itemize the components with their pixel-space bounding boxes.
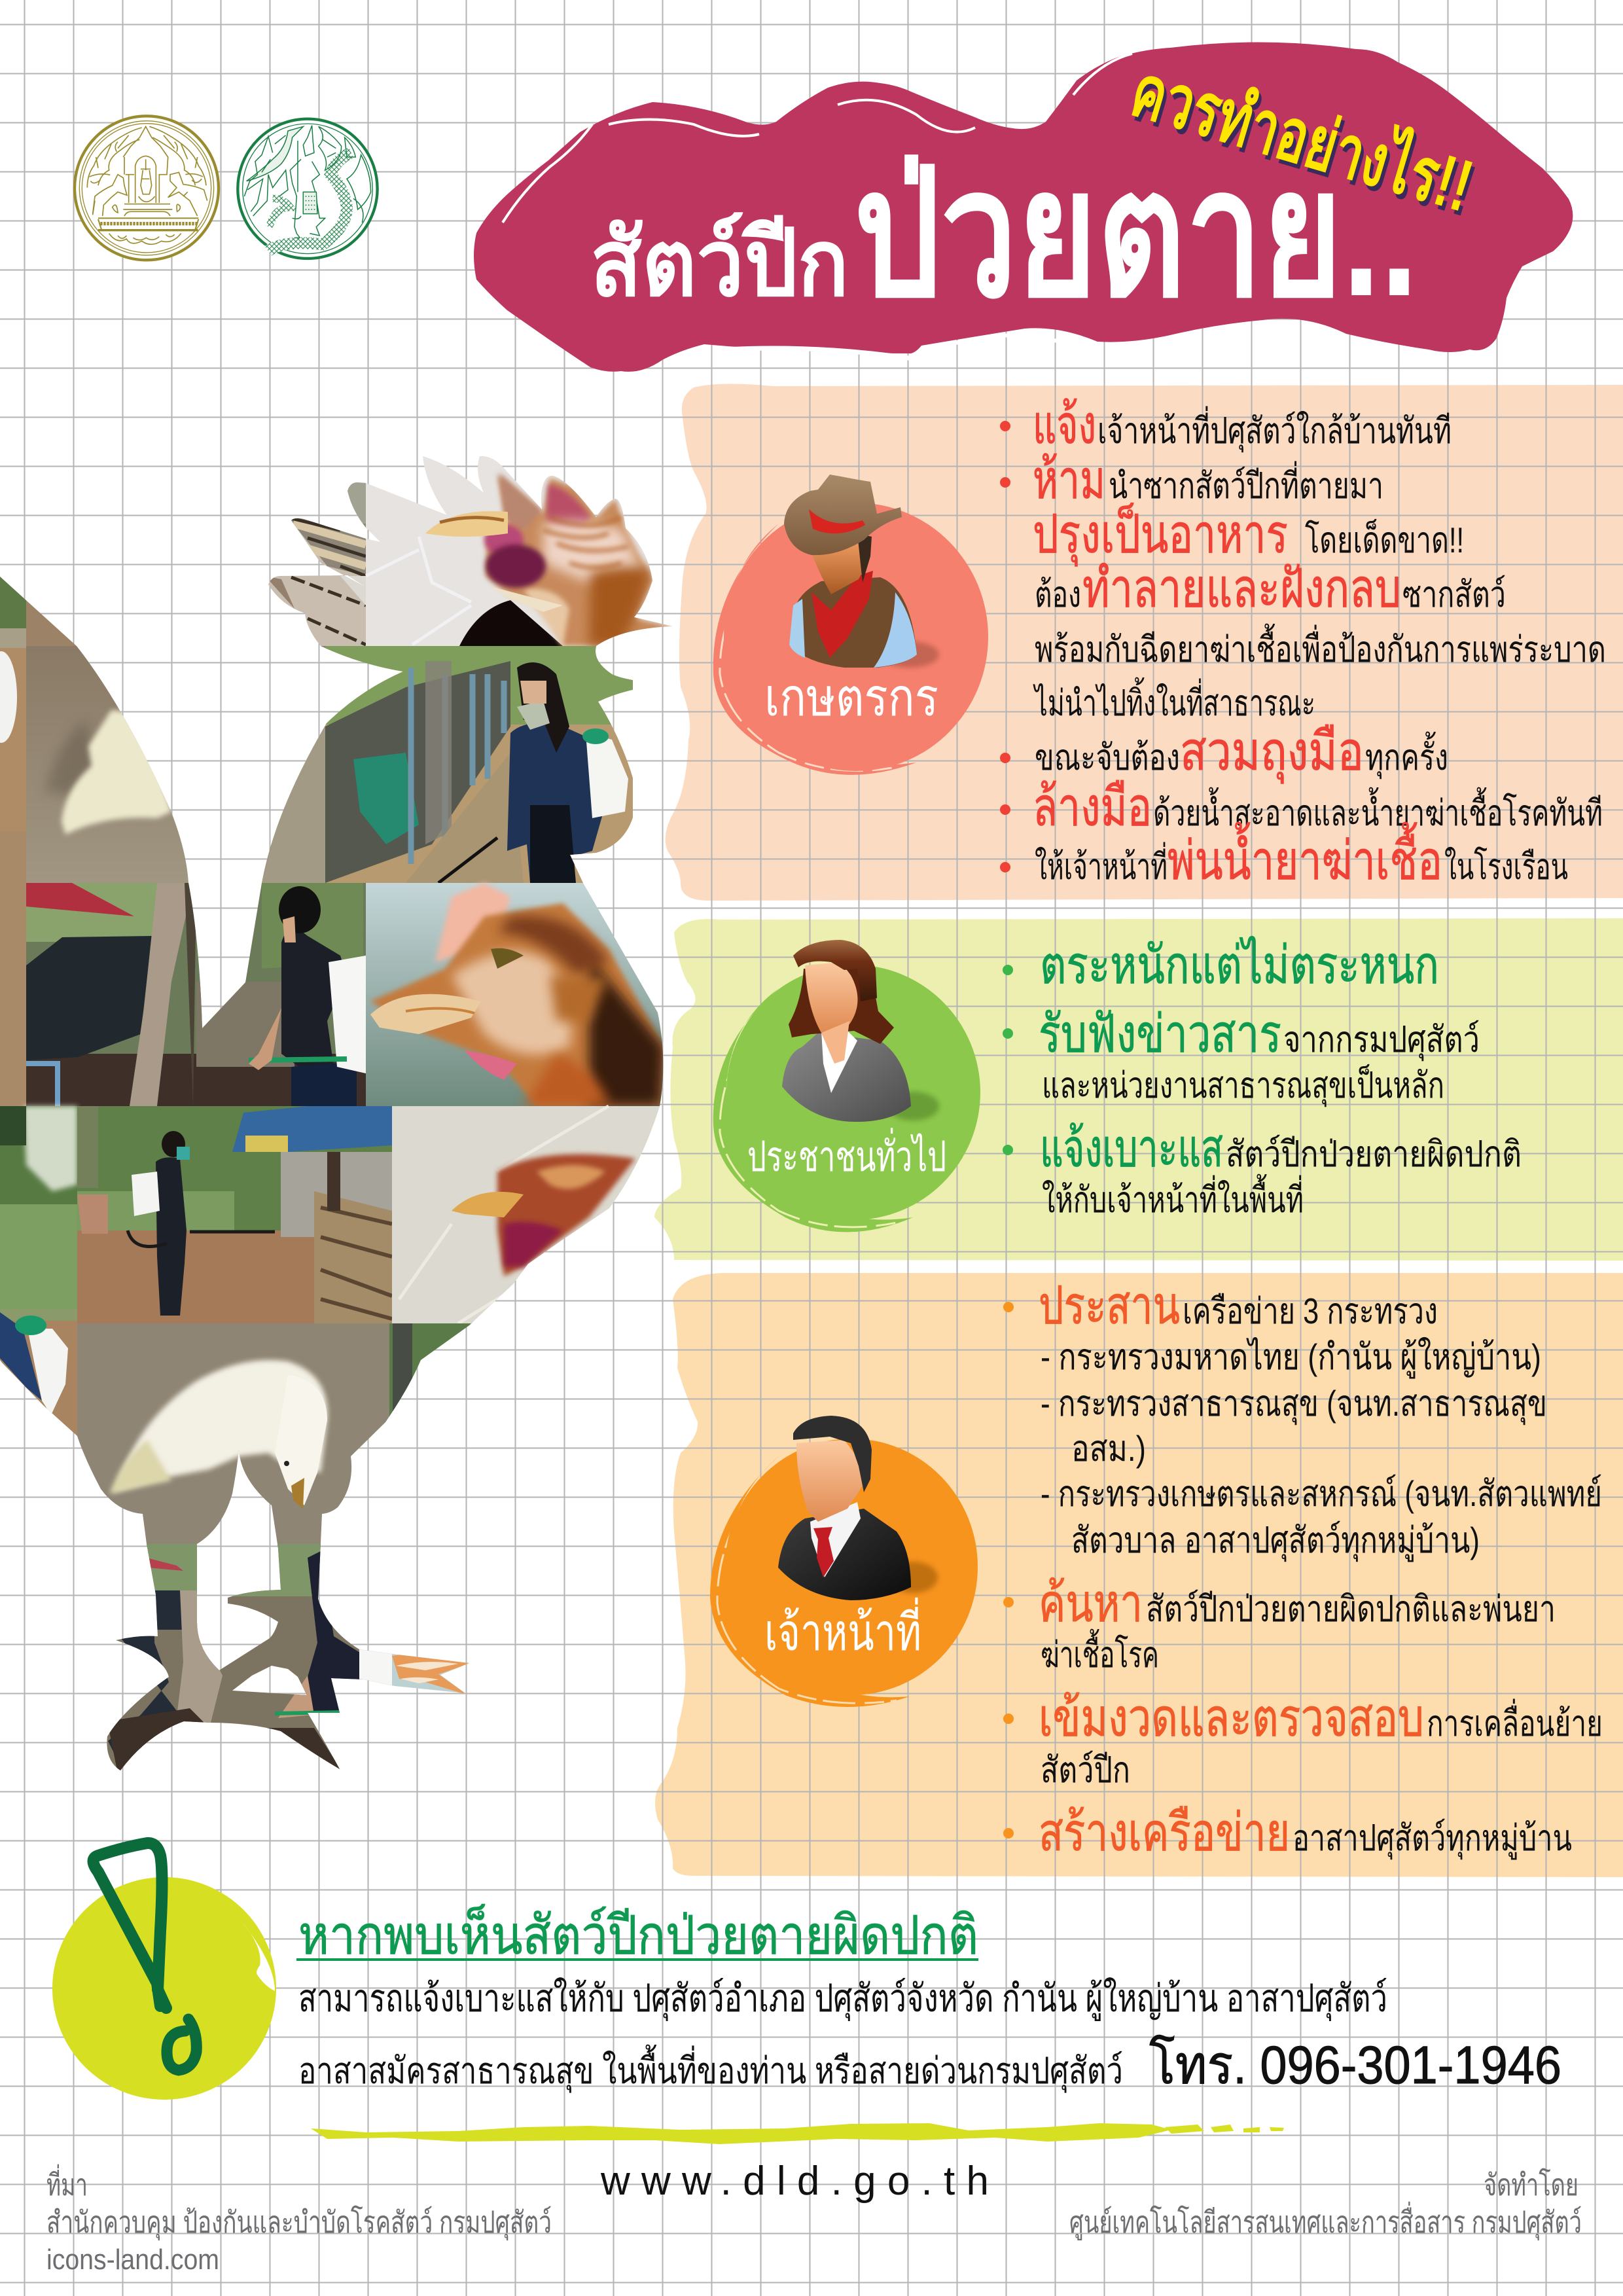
text block: public actions: รับฟังข่าวสาร: [1039, 1005, 1281, 1063]
photo tile: man spraying by crate: [77, 1106, 392, 1323]
photo tile: sick chicken purple face: [366, 452, 680, 646]
emblem: royal seal gold: [75, 116, 219, 260]
callout text: [298, 1977, 1387, 2093]
source credit: สำนักควบคุม ป้องกันและบำบัดโรคสัตว์ กรมปศุสัตว์: [46, 2205, 552, 2241]
text block: officer actions: เข้มงวดและตรวจสอบ: [1039, 1689, 1424, 1747]
text block: public actions: และหน่วยงานสาธารณสุขเป็นหลัก: [1042, 1064, 1444, 1107]
bullets: [1003, 1302, 1014, 1839]
blob brush streaks: [503, 54, 1132, 359]
icon: warning exclamation on yellow blob: [52, 1843, 276, 2100]
badge label: เกษตรกร: [764, 668, 938, 726]
text block: officer actions: สัตว์ปีก: [1041, 1749, 1130, 1790]
text block: farmer actions: [1000, 395, 1606, 891]
icon: woman: [782, 940, 939, 1122]
brush fringe: [713, 988, 913, 1232]
subtitle shadow and yellow: ควรทำอย่างไร!!: [1122, 48, 1482, 227]
text block: farmer actions: ทุกครั้ง: [1365, 732, 1448, 780]
text block: farmer actions: ซากสัตว์: [1402, 574, 1506, 615]
panel: officer background: [655, 1273, 1623, 1877]
subtitle shadow and yellow: ควรทำอย่างไร!!: [1125, 54, 1484, 232]
text block: public actions: ตระหนักแต่ไม่ตระหนก: [1040, 936, 1439, 994]
producer credit: จัดทำโดย: [1484, 2168, 1578, 2202]
website: www.dld.go.th: [600, 2159, 989, 2204]
circle badge: farmer: [713, 475, 988, 775]
photo tile: rooster legs: [105, 1544, 471, 1780]
badge label: ประชาชนทั่วไป: [747, 1128, 946, 1180]
callout text: อาสาสมัครสาธารณสุข ในพื้นที่ของท่าน หรือสายด่วนกรมปศุสัตว์: [298, 2045, 1123, 2093]
hotline number: โทร. 096-301-1946: [1149, 2036, 1561, 2095]
badge label: เจ้าหน้าที่: [764, 1598, 921, 1661]
circle badge: public: [713, 940, 980, 1232]
text block: officer actions: ฆ่าเชื้อโรค: [1041, 1629, 1159, 1675]
text block: farmer actions: ในโรงเรือน: [1444, 846, 1568, 887]
text block: farmer actions: แจ้ง: [1033, 395, 1096, 455]
text block: public actions: แจ้งเบาะแส: [1040, 1119, 1223, 1177]
text block: farmer actions: ไม่นำไปทิ้งในที่สาธารณะ: [1033, 677, 1315, 723]
text block: farmer actions: ทำลายและฝังกลบ: [1082, 559, 1401, 619]
photo tile: green right: [389, 1323, 474, 1428]
text block: public actions: [1003, 936, 1522, 1220]
source credit: icons-land.com: [46, 2244, 219, 2276]
photo tile: white bird on dirt: [26, 589, 327, 883]
photo tile: left column dirt: [0, 569, 26, 1106]
producer credit: [1069, 2168, 1582, 2241]
text block: officer actions: อสม.): [1071, 1428, 1146, 1469]
photo tile: dead white chicken: [77, 1323, 390, 1546]
bullets: [1003, 965, 1013, 1155]
text block: farmer actions: ปรุงเป็นอาหาร: [1033, 502, 1288, 567]
text block: public actions: สัตว์ปีกป่วยตายผิดปกติ: [1226, 1134, 1522, 1174]
text block: farmer actions: ให้เจ้าหน้าที่: [1035, 842, 1168, 887]
photo tile: chicken magenta wattle: [392, 1106, 667, 1323]
photo tile: backpack sprayer: [0, 1309, 77, 1446]
text block: public actions: ให้กับเจ้าหน้าที่ในพื้นที่: [1042, 1174, 1304, 1220]
text block: officer actions: [1003, 1276, 1603, 1861]
photo tile: chicken close-up: [366, 883, 667, 1106]
icon: cowboy farmer: [784, 475, 939, 668]
source credit: ที่มา: [46, 2164, 88, 2202]
text block: farmer actions: ขณะจับต้อง: [1035, 737, 1180, 778]
rooster photo collage: [0, 452, 680, 1780]
callout heading: หากพบเห็นสัตว์ปีกป่วยตายผิดปกติ: [298, 1903, 978, 1965]
title text: sick birds: สัตว์ปีก: [590, 211, 849, 315]
panel: farmer background: [666, 384, 1623, 901]
text block: farmer actions: ต้อง: [1035, 574, 1081, 615]
photo tile: wood crate feathers: [265, 481, 366, 646]
emblem: ministry seal green: [238, 119, 378, 259]
subtitle shadow and yellow: [1121, 48, 1486, 232]
text block: farmer actions: นำซากสัตว์ปีกที่ตายมา: [1109, 461, 1383, 506]
title text: dying: ป่วยตาย..: [854, 134, 1418, 333]
text block: officer actions: ประสาน: [1039, 1276, 1180, 1335]
title blob: [474, 42, 1573, 372]
text block: farmer actions: เจ้าหน้าที่ปศุสัตว์ใกล้บ้านทันที: [1097, 406, 1452, 453]
text block: farmer actions: ล้างมือ: [1033, 778, 1152, 837]
text block: farmer actions: พ่นน้ำยาฆ่าเชื้อ: [1168, 822, 1442, 891]
text block: officer actions: ค้นหา: [1039, 1574, 1143, 1632]
panel: public background: [654, 918, 1623, 1261]
text block: farmer actions: ห้าม: [1033, 450, 1105, 510]
photo tile: person spraying fence: [262, 646, 633, 883]
yellow brush divider: [311, 2123, 1284, 2144]
brush fringe: [710, 1456, 910, 1707]
brush fringe: [713, 524, 916, 775]
text block: officer actions: สัตวบาล อาสาปศุสัตว์ทุกหมู่บ้าน): [1071, 1520, 1480, 1562]
text block: officer actions: สร้างเครือข่าย: [1039, 1803, 1290, 1861]
photo tile: foliage left: [0, 1106, 77, 1323]
bullets: [1000, 421, 1010, 872]
photo tile: farm net and person: [26, 883, 366, 1106]
text block: farmer actions: โดยเด็ดขาด!!: [1305, 519, 1464, 560]
text block: public actions: จากกรมปศุสัตว์: [1283, 1019, 1480, 1062]
text block: officer actions: เครือข่าย 3 กระทรวง: [1183, 1291, 1438, 1331]
icon: man in suit: [778, 1416, 938, 1600]
circle badge: officer: [710, 1416, 978, 1707]
text block: farmer actions: สวมถุงมือ: [1180, 722, 1364, 784]
source credit: [46, 2164, 552, 2276]
